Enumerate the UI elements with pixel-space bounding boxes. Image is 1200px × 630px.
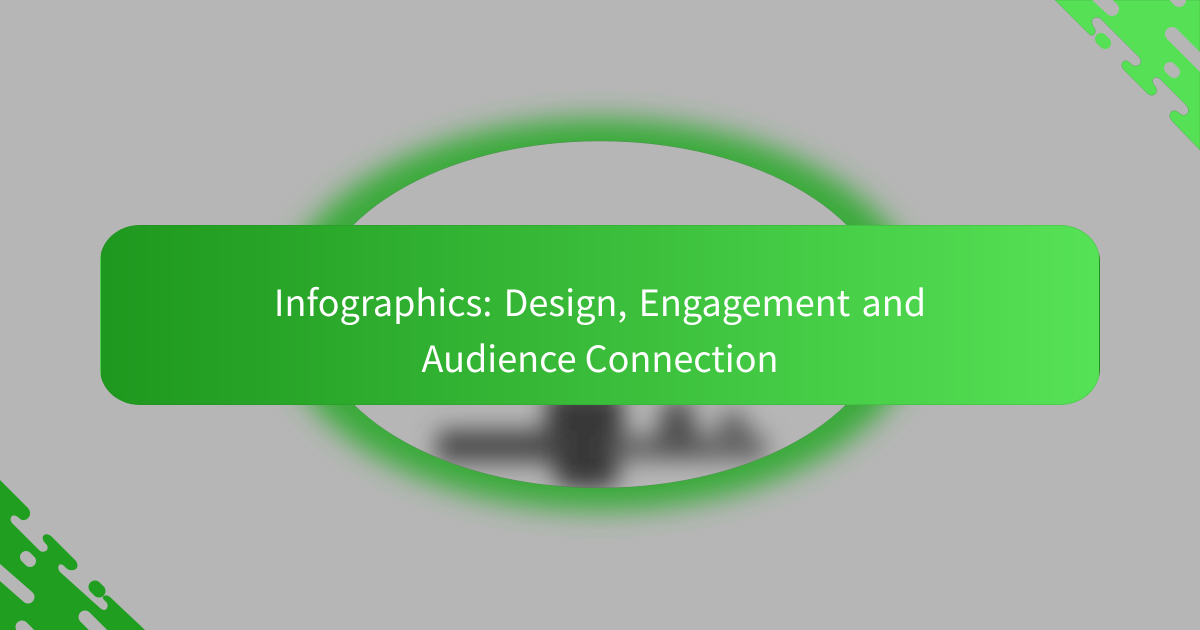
- blurred dark figure inside ring: [436, 390, 766, 488]
- title: Audience Connection: [422, 331, 778, 383]
- corner shape: bottom left: [0, 480, 145, 630]
- corner shape: top right: [1055, 0, 1200, 150]
- glowing green ring: [276, 118, 924, 510]
- title: [274, 275, 926, 383]
- title banner: [100, 225, 1100, 405]
- title: Infographics: Design, Engagement and: [274, 275, 926, 327]
